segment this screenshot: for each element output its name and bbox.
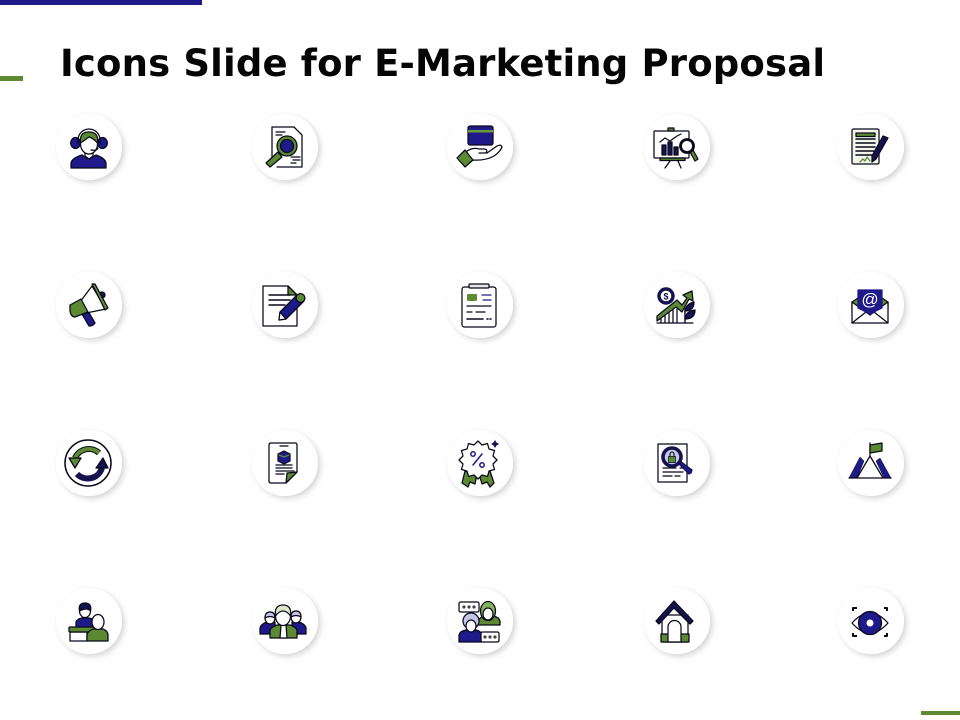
badge [838,272,904,338]
icon: contract and pen [852,129,888,164]
top accent bar [0,0,202,5]
icon: percent rosette [459,440,499,487]
tile: consultation [56,588,122,654]
icon: eye with focus corners [852,608,888,636]
badge [252,114,318,180]
badge [447,430,513,496]
badge [838,114,904,180]
badge [838,430,904,496]
tile: financial growth [644,272,710,338]
tile: customer support agent [56,114,122,180]
tile: presentation analytics [644,114,710,180]
badge [252,588,318,654]
badge [644,272,710,338]
icon: chart board with magnifier [654,128,698,168]
tile: card payment [447,114,513,180]
icon: two people with speech bubbles [459,602,500,642]
tile: secure document search [644,430,710,496]
tile: email [838,272,904,338]
left accent bar [0,76,23,81]
icon: mountain with flag [849,443,891,478]
icon: megaphone [70,284,108,326]
tile: clipboard report [447,272,513,338]
tile: refresh cycle [56,430,122,496]
icon: coin, arrow and plant: $ [663,292,669,302]
title: Icons Slide for E-Marketing Proposal [60,42,825,85]
tile: document editing [252,272,318,338]
tile: vision [838,588,904,654]
tile: discount badge [447,430,513,496]
badge [447,114,513,180]
icon: document and pencil [263,286,305,326]
badge [56,588,122,654]
tile: signed contract [838,114,904,180]
badge [447,588,513,654]
badge [56,114,122,180]
tile: home [644,588,710,654]
tile: megaphone [56,272,122,338]
badge [56,272,122,338]
icon: document, lock and magnifier [658,444,692,482]
icon: document with cube [269,443,297,483]
badge [252,430,318,496]
icon: clipboard [462,284,496,327]
badge [447,272,513,338]
icon: group of three people [260,605,306,638]
icon: circular arrows [65,440,111,486]
icon: document and magnifier [266,127,302,167]
icon: house [656,601,693,642]
icon: open envelope with at sign: @ [861,290,879,309]
icon: headset agent [71,129,107,168]
tile: document search [252,114,318,180]
badge [644,114,710,180]
badge [838,588,904,654]
icon: credit card on hand [457,126,502,167]
tile: mountain goal [838,430,904,496]
icon: two people at a desk [69,603,108,641]
tile: team [252,588,318,654]
tile: customer conversation [447,588,513,654]
badge [644,588,710,654]
badge [56,430,122,496]
tile: product document [252,430,318,496]
badge [644,430,710,496]
bottom right accent bar [921,711,960,715]
badge [252,272,318,338]
